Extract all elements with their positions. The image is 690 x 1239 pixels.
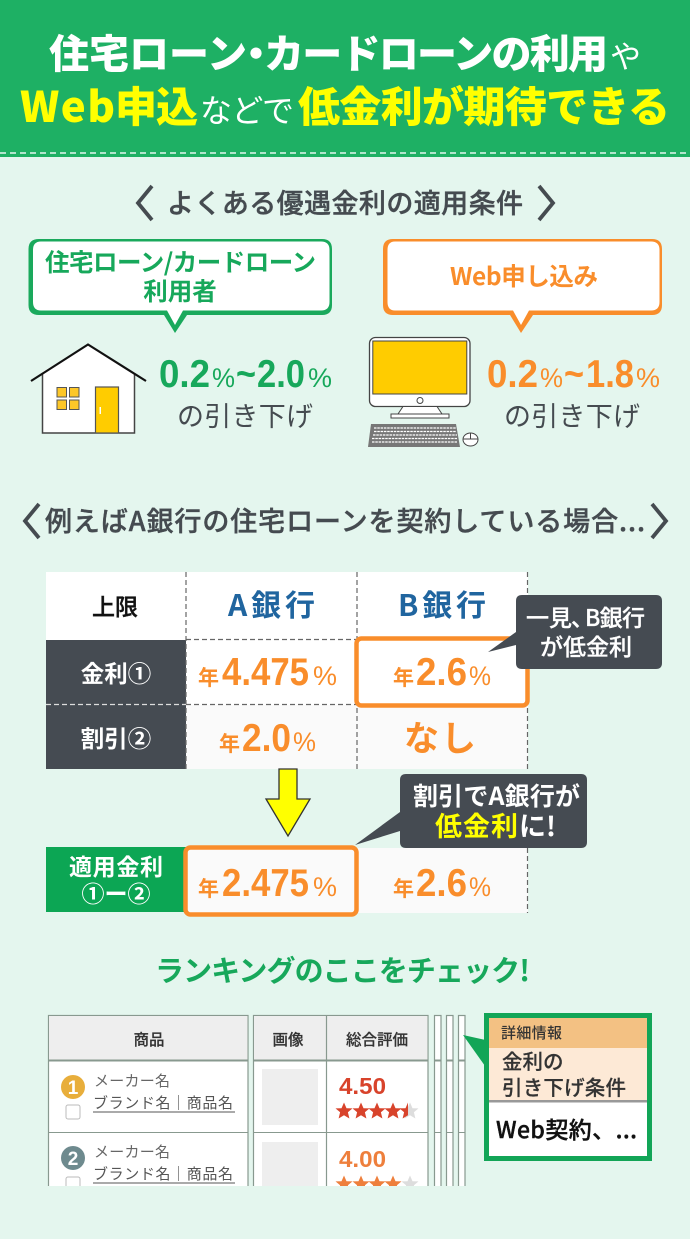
rate text: 0.2%~1.8%: 0.2 [487,353,538,396]
rank 2 item: メーカー名 [94,1141,170,1162]
rank 2 item: 4.00 [339,1146,386,1172]
rank 1 item: 1 [68,1078,79,1099]
speech bubble: web application [383,239,662,333]
title line 2: 申込 [115,74,198,135]
row: applied interest: % [313,872,337,902]
callout: B looks cheaper: 一見 [526,599,572,633]
title line 2: 低金利が期待できる [298,74,670,135]
arrow: down [266,769,310,836]
row: applied interest: 適用金利 [69,848,163,882]
row: applied interest: 2.6 [416,862,467,905]
callout: B looks cheaper [488,595,662,669]
callout: B looks cheaper: 、 [571,599,594,633]
value: bank B discount none: なし [404,711,478,762]
speech bubble: web application: Web申し込み [450,258,598,293]
title line 1: ・ [236,22,276,80]
title line 1: 住宅ローン [49,22,247,80]
table header: limit: 上限 [92,588,138,622]
text: reduction label left: の引き下げ [177,395,313,434]
text: reduction label right: の引き下げ [504,395,640,434]
speech bubble: loan users: 住宅ローン/カードローン [45,244,316,279]
section heading: ranking check: ランキングのここをチェック! [155,948,530,990]
rank 2 item [61,1142,418,1186]
value: bank A rate: % [313,661,337,691]
rate text: 0.2%~1.8%: 1.8 [586,353,634,396]
rank 2 item: 2 [68,1149,78,1170]
value: bank A discount: 年 [219,728,240,758]
row: applied interest: ①ー② [82,875,150,909]
rate text: 0.2%~1.8%: ~ [564,353,584,396]
column header: image: 画像 [272,1028,304,1050]
callout: A becomes cheaper [355,774,587,848]
rate text: 0.2%~2.0%: % [212,363,235,393]
callout: A becomes cheaper: に! [519,805,556,844]
title line 2: Web [20,74,115,135]
rank 1 item: 4.50 [339,1073,386,1099]
callout: B looks cheaper: が低金利 [540,628,632,662]
row: applied interest: 2.475 [222,862,309,905]
speech bubble: loan users: 利用者 [143,273,217,308]
rate text: 0.2%~2.0%: ~ [236,353,256,396]
table header: bank B: B銀行 [398,581,486,625]
value: bank A rate: 年 [198,662,219,692]
icon: house [31,344,146,433]
rate text: 0.2%~1.8%: % [540,363,563,393]
detail info popup [463,1016,650,1158]
icon: desktop computer [368,338,478,447]
rate text: 0.2%~2.0%: 0.2 [159,353,210,396]
callout: A becomes cheaper: 低金利 [435,805,518,844]
detail info popup: 詳細情報 [501,1022,562,1043]
row: applied interest: 年 [393,873,414,903]
title line 1: や [610,32,641,77]
title line 1: カードローンの利用 [264,22,608,80]
value: bank A rate: 4.475 [222,651,309,694]
ranking table mock [48,1015,465,1206]
highlight: bank B rate [356,638,528,706]
value: bank A discount: % [293,727,316,757]
detail info popup: 金利の [502,1045,564,1075]
highlight: bank B rate: 年 [393,662,414,692]
detail info popup: Web契約、... [496,1111,637,1145]
callout: A becomes cheaper: 割引でA銀行が [413,777,580,813]
header banner [0,0,690,157]
rank 1 item [61,1069,418,1125]
rate text: 0.2%~1.8%: % [636,363,660,393]
row label: discount: 割引② [81,720,151,754]
rank 1 item: ブランド名｜商品名 [93,1092,233,1113]
rate text: 0.2%~2.0%: 2.0 [257,353,305,396]
detail info popup: 引き下げ条件 [502,1071,626,1101]
speech bubble: loan users [28,239,332,333]
table header: bank A: A銀行 [227,581,315,625]
row: applied interest [46,847,491,914]
section heading: conditions: よくある優遇金利の適用条件 [167,182,523,221]
row: applied interest: % [469,872,491,902]
row label: interest: 金利① [81,655,151,689]
rank 2 item: ブランド名｜商品名 [93,1163,233,1184]
value: bank A discount: 2.0 [242,717,291,760]
row: applied interest: 年 [198,873,219,903]
highlight: bank B rate: 2.6 [416,651,467,694]
rate text: 0.2%~2.0%: % [308,363,332,393]
column header: product: 商品 [133,1028,165,1050]
highlight: bank B rate: % [469,661,491,691]
section heading: example: 例えばA銀行の住宅ローンを契約している場合... [45,500,645,539]
comparison table [46,572,528,913]
title line 2: などで [200,86,294,132]
column header: rating: 総合評価 [346,1028,408,1050]
rank 1 item: メーカー名 [94,1070,170,1091]
callout: B looks cheaper: B銀行 [585,599,645,633]
